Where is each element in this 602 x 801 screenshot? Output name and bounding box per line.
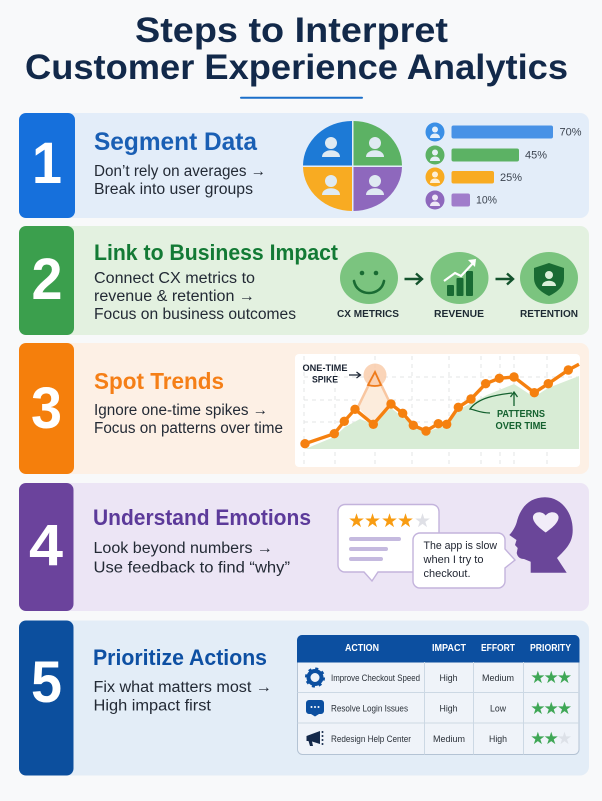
labels: metric names: CX METRICS — [337, 308, 399, 320]
bar chart of segment share: 25% — [500, 172, 522, 184]
label: one-time spike: ONE-TIME — [302, 363, 348, 374]
number tab 5: 5 — [31, 650, 62, 715]
panel: step 5 prioritize actions — [19, 620, 589, 776]
panel: step 3 spot trends — [19, 343, 589, 474]
arrow: revenue to retention — [496, 274, 513, 284]
table row: redesign help center: Medium — [433, 734, 465, 745]
text: prioritize description: High impact first — [94, 698, 212, 715]
text: segment description — [94, 163, 266, 198]
label: one-time spike: SPIKE — [312, 374, 338, 386]
arrow: cx to revenue — [404, 274, 422, 284]
text: business impact description: revenue & retention → — [94, 288, 255, 305]
heading: understand emotions: Understand Emotions — [93, 505, 311, 530]
panel: step 4 understand emotions — [19, 483, 589, 611]
table header row: IMPACT — [432, 643, 466, 654]
table row: improve checkout speed — [306, 668, 572, 687]
table row: resolve login issues: Low — [490, 704, 506, 714]
title: Customer Experience Analytics — [25, 47, 568, 87]
table row: resolve login issues: High — [440, 704, 458, 714]
callout: spike highlight — [358, 364, 390, 424]
table row: resolve login issues: ★ — [557, 699, 572, 718]
labels: metric names — [337, 308, 578, 320]
review bubble with stars — [338, 504, 439, 581]
priority table — [297, 635, 580, 754]
bar chart of segment share: 45% — [525, 150, 547, 162]
label: one-time spike — [302, 363, 360, 386]
review bubble with stars: ★ — [381, 511, 398, 532]
quote bubble: checkout. — [424, 568, 470, 580]
number tab 2 — [19, 226, 74, 335]
review bubble with stars: ★ — [348, 511, 365, 532]
number tab 1 — [19, 113, 75, 218]
icon: retention shield — [520, 252, 578, 304]
number tab 1: 1 — [32, 131, 62, 196]
table row: redesign help center: ★ — [544, 729, 559, 748]
panel: step 2 link to business impact — [19, 226, 589, 335]
number tab 4 — [19, 483, 74, 611]
table row: redesign help center: ★ — [557, 729, 572, 748]
review bubble with stars: ★ — [364, 511, 381, 532]
review bubble with stars: ★ — [397, 511, 414, 532]
icon: head with heart — [509, 497, 573, 573]
number tab 2: 2 — [32, 247, 62, 312]
table header row: PRIORITY — [530, 643, 571, 654]
panel: step 1 segment data — [19, 113, 589, 218]
table header row: EFFORT — [481, 643, 515, 654]
number tab 3: 3 — [31, 376, 62, 441]
table row: improve checkout speed: ★ — [544, 668, 559, 687]
table row: redesign help center — [306, 729, 572, 748]
table header row — [345, 643, 571, 654]
label: patterns over time: OVER TIME — [496, 420, 546, 432]
table row: resolve login issues: ★ — [530, 699, 545, 718]
title: Steps to Interpret — [135, 10, 448, 50]
text: segment description: Don’t rely on averages → — [94, 163, 266, 180]
table row: redesign help center: ★ — [530, 729, 545, 748]
table row: redesign help center: High — [489, 734, 507, 745]
heading: prioritize actions: Prioritize Actions — [93, 645, 267, 670]
labels: metric names: RETENTION — [520, 308, 578, 320]
table row: resolve login issues — [306, 699, 572, 718]
table row: improve checkout speed: ★ — [530, 668, 545, 687]
table row: improve checkout speed: High — [440, 673, 458, 684]
labels: metric names: REVENUE — [434, 308, 484, 320]
bar chart of segment share: 10% — [476, 194, 497, 206]
text: emotions description — [94, 540, 290, 577]
bar chart of segment share — [426, 122, 582, 210]
text: business impact description — [94, 270, 296, 323]
number tab 5 — [19, 620, 74, 776]
area: pattern baseline — [305, 376, 579, 449]
table row: resolve login issues: Resolve Login Issues — [331, 704, 408, 714]
quote bubble — [413, 533, 515, 588]
quote bubble: The app is slow — [424, 540, 497, 552]
table header row: ACTION — [345, 643, 379, 654]
icon: smiley cx metrics — [340, 252, 398, 304]
label: patterns over time: PATTERNS — [497, 408, 545, 420]
text: trends description: Ignore one-time spikes → — [94, 402, 268, 419]
table row: improve checkout speed: Improve Checkout Speed — [331, 673, 420, 684]
text: prioritize description — [94, 679, 272, 715]
label: patterns over time — [470, 392, 546, 432]
heading: link to business impact: Link to Business Impact — [94, 240, 338, 265]
table row: improve checkout speed: ★ — [557, 668, 572, 687]
table row: redesign help center: Redesign Help Center — [331, 734, 411, 745]
icon: revenue growth — [430, 252, 488, 304]
heading: segment data: Segment Data — [94, 128, 258, 156]
table row: improve checkout speed: Medium — [482, 673, 514, 684]
number tab 3 — [19, 343, 74, 474]
pie chart of user groups — [303, 121, 402, 211]
number tab 4: 4 — [29, 513, 63, 578]
text: business impact description: Focus on business outcomes — [94, 306, 296, 323]
table row: resolve login issues: ★ — [544, 699, 559, 718]
text: prioritize description: Fix what matters most → — [94, 679, 272, 696]
text: emotions description: Look beyond numbers → — [94, 540, 273, 557]
title — [25, 10, 568, 87]
bar chart of segment share: 70% — [560, 126, 582, 138]
quote bubble: when I try to — [422, 554, 484, 566]
text: business impact description: Connect CX metrics to — [94, 270, 255, 287]
line chart: trend — [295, 354, 580, 467]
trend line with markers — [300, 364, 579, 448]
review bubble with stars: ★ — [414, 511, 431, 532]
heading: spot trends: Spot Trends — [94, 368, 224, 394]
text: segment description: Break into user groups — [94, 181, 253, 198]
text: trends description — [94, 402, 283, 437]
text: trends description: Focus on patterns over time — [94, 420, 283, 437]
text: emotions description: Use feedback to find “why” — [94, 560, 290, 577]
